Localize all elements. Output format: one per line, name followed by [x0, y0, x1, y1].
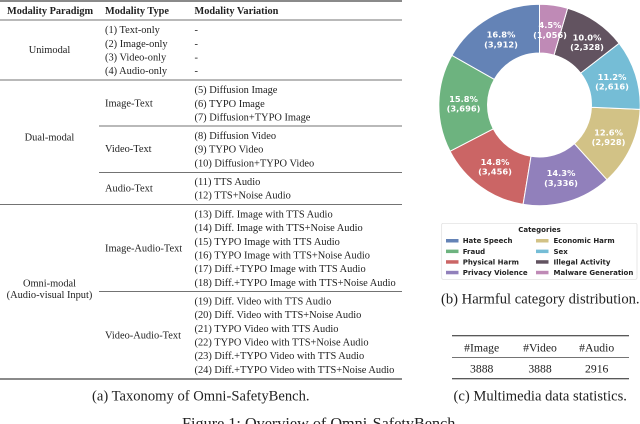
modality type column: Video-Audio-Text [105, 330, 181, 342]
donut labels: 15.8% [449, 94, 479, 104]
legend: Illegal Activity [554, 258, 611, 266]
modality variation column: (18) Diff.+TYPO Image with TTS+Noise Audio [194, 278, 396, 289]
donut labels [447, 20, 629, 188]
donut labels: (3,912) [484, 40, 518, 50]
panel: multimedia statistics table [452, 336, 629, 379]
modality paradigm column [7, 45, 92, 301]
modality variation column: (9) TYPO Video [194, 145, 263, 156]
panel: multimedia statistics table: #Audio [579, 342, 614, 354]
donut labels: (2,616) [595, 82, 629, 92]
modality variation column: - [194, 52, 198, 64]
legend: Fraud [463, 248, 485, 256]
legend: Categories [518, 226, 561, 234]
modality variation column: (19) Diff. Video with TTS Audio [194, 296, 331, 308]
modality variation column: (12) TTS+Noise Audio [194, 191, 291, 202]
modality variation column: (14) Diff. Image with TTS+Noise Audio [194, 223, 363, 234]
donut chart [439, 4, 640, 206]
donut labels: 14.3% [547, 168, 576, 178]
modality variation column: (7) Diffusion+TYPO Image [194, 112, 311, 124]
modality variation column: - [194, 25, 198, 36]
modality type column: (3) Video-only [105, 52, 167, 64]
donut labels: (2,328) [570, 42, 604, 52]
donut labels: 10.0% [573, 32, 602, 42]
modality variation column: (15) TYPO Image with TTS Audio [194, 237, 340, 248]
donut labels: 14.8% [481, 157, 510, 167]
modality variation column: (13) Diff. Image with TTS Audio [194, 210, 333, 220]
modality type column: Image-Text [105, 98, 153, 110]
caption b: (b) Harmful category distribution. [441, 292, 640, 308]
table header [7, 6, 279, 17]
modality variation column: (10) Diffusion+TYPO Video [194, 158, 314, 169]
modality type column: (1) Text-only [105, 25, 161, 36]
panel: taxonomy table [0, 1, 402, 379]
modality paradigm column: Dual-modal [25, 132, 74, 143]
caption c: (c) Multimedia data statistics. [454, 388, 627, 404]
modality variation column: (21) TYPO Video with TTS Audio [194, 324, 338, 335]
donut labels: (2,928) [592, 137, 626, 147]
table rules [0, 1, 402, 379]
donut labels: (3,456) [478, 166, 512, 176]
modality variation column: (22) TYPO Video with TTS+Noise Audio [194, 338, 369, 349]
modality variation column: - [194, 66, 198, 77]
modality type column: Image-Audio-Text [105, 244, 182, 254]
panel: multimedia statistics table: 3888 [528, 362, 552, 375]
table header: Modality Type [105, 6, 169, 17]
modality variation column: (17) Diff.+TYPO Image with TTS Audio [194, 264, 366, 275]
donut labels: 12.6% [594, 128, 624, 138]
modality paradigm column: (Audio-visual Input) [7, 290, 92, 301]
legend: Economic Harm [554, 237, 615, 245]
modality type column [105, 25, 182, 341]
table header: Modality Paradigm [7, 6, 94, 17]
legend: Hate Speech [463, 237, 513, 245]
modality type column: (2) Image-only [105, 39, 168, 50]
modality type column: Audio-Text [105, 184, 153, 194]
modality type column: (4) Audio-only [105, 66, 168, 77]
donut labels: (3,696) [447, 104, 481, 114]
modality variation column [194, 25, 396, 376]
modality paradigm column: Unimodal [29, 45, 70, 56]
donut labels: 11.2% [598, 72, 627, 82]
donut labels: (1,056) [533, 30, 567, 40]
panel: multimedia statistics table: #Image [464, 342, 499, 354]
modality variation column: (23) Diff.+TYPO Video with TTS Audio [194, 351, 364, 362]
panel: multimedia statistics table: 3888 [470, 362, 494, 375]
donut labels: 16.8% [487, 30, 516, 40]
donut labels: (3,336) [544, 178, 578, 188]
modality paradigm column: Omni-modal [23, 278, 76, 290]
table header: Modality Variation [194, 6, 279, 17]
modality variation column: (16) TYPO Image with TTS+Noise Audio [194, 251, 370, 262]
legend: Malware Generation [554, 269, 633, 277]
legend: Sex [554, 248, 568, 256]
legend: Physical Harm [463, 258, 519, 266]
donut labels: 4.5% [538, 20, 562, 30]
modality variation column: (8) Diffusion Video [194, 131, 276, 142]
modality variation column: (6) TYPO Image [194, 99, 265, 110]
modality variation column: (11) TTS Audio [194, 177, 260, 188]
modality variation column: (24) Diff.+TYPO Video with TTS+Noise Audio [194, 365, 394, 376]
modality variation column: (5) Diffusion Image [194, 85, 278, 96]
caption a: (a) Taxonomy of Omni-SafetyBench. [92, 388, 310, 404]
legend: Privacy Violence [463, 269, 528, 277]
modality type column: Video-Text [105, 144, 152, 155]
panel: multimedia statistics table: 2916 [585, 362, 609, 375]
panel: multimedia statistics table: #Video [523, 342, 557, 354]
modality variation column: - [194, 39, 198, 50]
legend [442, 223, 637, 279]
modality variation column: (20) Diff. Video with TTS+Noise Audio [194, 310, 361, 321]
